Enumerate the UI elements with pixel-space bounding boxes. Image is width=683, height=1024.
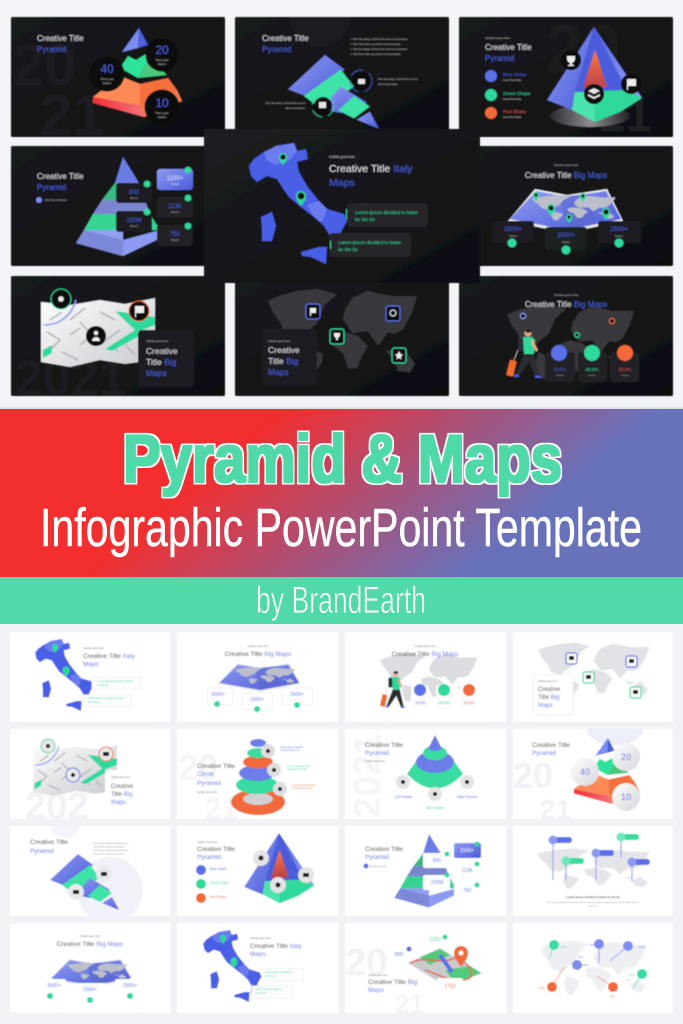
panel: light pyramid numbers slide: 21: [540, 794, 571, 825]
panel: dark slide traveller map: [459, 276, 673, 396]
panel: dark slide pyramid numbers: Pyramid: [37, 45, 66, 54]
panel: light stacked pyramid slide: 113K: [461, 868, 473, 874]
panel: dark slide traveller map: 70,5%: [553, 367, 567, 372]
panel: dark slide world map with pins: [235, 276, 449, 396]
panel: light route map slide: ITALY: [629, 974, 636, 977]
panel: light big maps slide: 3500+: [47, 983, 61, 989]
panel: light Italy slide lower: Maps: [250, 951, 267, 958]
panel: dark slide street map: Maps: [146, 368, 167, 378]
panel: featured Italy map slide: Creative Title Italy: [329, 163, 413, 175]
panel: featured Italy map slide: Subtitle goes here: [329, 155, 355, 159]
panel: light Italy slide lower: [177, 923, 338, 1013]
panel: light world map pins slide: Title Big: [538, 695, 559, 701]
panel: dark slide street map: [11, 276, 225, 406]
panel: dark slide stepped pyramid: and mountains: [378, 82, 398, 86]
panel: dark slide big folded map: Creative Title Big Maps: [525, 171, 607, 180]
panel: dark slide big folded map: [459, 146, 673, 266]
panel: light stacked pyramid slide: Pyramid: [365, 854, 389, 861]
panel: dark slide stepped pyramid: Pyramid: [262, 45, 291, 54]
panel: light stacked pyramid slide: Creative Title: [365, 846, 403, 853]
panel: light Italy slide lower: Creative Title Italy: [250, 943, 302, 950]
panel: light Italy slide lower: Lorem Ipsum decided to: [265, 971, 292, 974]
panel: dark slide street map: Creative: [146, 346, 178, 356]
panel: dark slide stepped pyramid: Far far away, behind the word: [266, 101, 305, 105]
panel: dark slide world map with pins: Title Big: [268, 356, 299, 366]
panel: dark slide pyramid numbers: This is your: [100, 77, 114, 81]
panel: light tall pyramid slide: Creative Title: [197, 846, 235, 853]
strip: by BrandEarth: by BrandEarth: [256, 580, 426, 622]
panel: light cone pyramid slide: Mid Pyramid: [426, 806, 444, 810]
panel: light tall pyramid slide: Pyramid: [197, 854, 221, 861]
panel: featured Italy map slide: Lorem Ipsum decided to leave: [355, 210, 418, 215]
panel: light folded map slide: Creative Title Big Maps: [225, 651, 292, 658]
panel: light circle pyramid slide: Pyramid: [197, 780, 221, 787]
panel: dark slide tall pyramid: 20: [545, 11, 621, 87]
panel: featured Italy map slide: for the far: [338, 247, 359, 252]
panel: light street map slide: 202: [25, 786, 88, 828]
panel: dark slide stepped pyramid: ✓ Far far away, behind the word mountains: [350, 47, 408, 51]
panel: light route map slide: EPL: [590, 944, 595, 947]
panel: light world map pins slide: Subtitle goes here: [538, 680, 558, 683]
panel: dark slide stacked pyramid: 113K: [168, 204, 182, 210]
panel: dark slide street map: 2021: [15, 350, 126, 406]
panel: light isometric map slide: 1750: [444, 984, 456, 990]
panel: light Italy slide lower: for the far: [265, 975, 276, 978]
panel: light pyramid numbers slide: Creative Title: [532, 742, 570, 749]
panel: dark slide stacked pyramid: 800: [129, 190, 140, 196]
heading: Pyramid & Maps: Pyramid & Maps: [123, 421, 562, 497]
panel: light circle pyramid slide: to leave for the far: [280, 749, 299, 752]
panel: light Italy slide: for the far: [88, 700, 100, 704]
panel: dark slide tall pyramid: Pyramid: [485, 54, 514, 63]
panel: light circle pyramid slide: to leave for the far: [292, 787, 311, 790]
panel: dark slide traveller map: Tourism: [556, 374, 564, 377]
panel: dark slide pyramid numbers: This is your: [155, 111, 169, 115]
panel: light stepped pyramid slide: Pyramid: [30, 848, 54, 855]
panel: light tall pyramid slide: [177, 826, 338, 916]
panel: light world map with flag pins slide: Far far away, behind the word mountains, far from the countries vokalia and Consonantia. Were they live: [547, 901, 640, 904]
panel: featured Italy map slide: Maps: [329, 177, 355, 189]
panel: light stacked pyramid slide: 800: [433, 858, 441, 864]
panel: light traveller slide: 80,5%: [439, 701, 450, 705]
panel: light Italy slide lower: Subtitle goes here: [250, 936, 271, 940]
panel: dark slide big folded map: Tourism: [615, 235, 623, 238]
panel: light tall pyramid slide: Blue Shape: [210, 867, 227, 871]
panel: light traveller slide: Creative Title Big Maps: [392, 651, 459, 658]
panel: light circle pyramid slide: to leave for the far: [287, 768, 306, 771]
panel: dark slide pyramid numbers: 10: [155, 96, 169, 110]
panel: light route map slide: TOKIO: [638, 946, 646, 949]
panel: light isometric map slide: Subtitle goes here: [368, 974, 388, 977]
panel: light circle pyramid slide: [177, 729, 338, 826]
panel: dark slide stepped pyramid: ✓ Far far away, behind the word mountains: [350, 37, 408, 41]
panel: light stepped pyramid slide: Creative Title: [30, 839, 68, 846]
panel: light cone pyramid slide: Creative Title: [365, 742, 403, 749]
panel: light tall pyramid slide: Red Shape: [210, 895, 226, 899]
panel: light cone pyramid slide: Right Pyramid: [457, 795, 477, 799]
panel: light traveller slide: [345, 632, 506, 722]
panel: dark slide world map with pins: Creative: [268, 345, 300, 355]
panel: dark slide pyramid numbers: 40: [100, 62, 114, 76]
panel: light route map slide: USA: [578, 956, 583, 959]
panel: dark slide pyramid numbers: This is your: [155, 58, 169, 62]
panel: dark slide big folded map: Tourism: [509, 235, 517, 238]
panel: dark slide pyramid numbers: feature: [158, 62, 167, 66]
panel: dark slide tall pyramid: Insert Text Here: [503, 78, 522, 82]
panel: dark slide stacked pyramid: Add Text Is Market: [45, 198, 67, 202]
panel: light circle pyramid slide: Circle: [197, 771, 214, 778]
panel: dark slide traveller map: 35,5%: [618, 367, 632, 372]
panel: featured Italy map slide: [204, 129, 480, 283]
panel: dark slide world map with pins: Maps: [268, 367, 289, 377]
panel: light stacked pyramid slide: [345, 826, 506, 916]
panel: light route map slide: MAX: [610, 995, 616, 998]
panel: light isometric map slide: 800: [395, 952, 403, 958]
panel: light big maps slide: Creative Title Big Maps: [57, 941, 124, 948]
panel: light Italy slide: Creative Title Italy: [83, 653, 135, 660]
panel: light folded map slide: 3500+: [211, 692, 225, 698]
panel: light Italy slide: for the far: [97, 683, 109, 687]
panel: light street map slide: Maps: [111, 800, 126, 806]
panel: light route map slide: LAND: [538, 987, 545, 990]
panel: light isometric map slide: 20: [345, 942, 387, 984]
panel: light tall pyramid slide: Subtitle Goes Here: [197, 841, 218, 844]
panel: light folded map slide: 2500+: [290, 692, 304, 698]
panel: dark slide tall pyramid: [459, 11, 673, 141]
panel: light big maps slide: Subtitle goes here: [80, 934, 101, 938]
panel: light isometric map slide: 21: [395, 989, 424, 1019]
panel: light pyramid numbers slide: Pyramid: [532, 750, 556, 757]
panel: dark slide tall pyramid: Blue Shape: [503, 72, 527, 77]
panel: light street map slide: Title Big: [111, 792, 132, 798]
panel: light route map slide: MAX: [561, 946, 567, 949]
panel: dark slide traveller map: Creative Title Big Maps: [525, 300, 607, 309]
panel: dark slide stepped pyramid: Far far away, behind the word: [378, 77, 418, 81]
panel: dark slide stacked pyramid: [11, 146, 225, 266]
panel: light stacked pyramid slide: 230M: [431, 880, 443, 886]
panel: dark slide pyramid numbers: feature: [158, 115, 167, 119]
panel: light folded map slide: [177, 632, 338, 722]
panel: dark slide stacked pyramid: Point E: [171, 239, 179, 242]
panel: light circle pyramid slide: Lorem Ipsum decided: [287, 765, 311, 768]
panel: dark slide big folded map: 1500+: [557, 232, 575, 239]
panel: light stepped pyramid slide: ✓ Far from the countries Consonantia: [92, 852, 125, 856]
panel: light Italy slide: Lorem Ipsum decided to leave: [88, 696, 125, 700]
panel: light world map pins slide: Creative: [538, 687, 561, 693]
panel: dark slide pyramid numbers: Creative Title: [37, 34, 84, 43]
panel: dark slide tall pyramid: Insert Text Here: [503, 115, 522, 119]
panel: dark slide stacked pyramid: 230M: [126, 218, 142, 224]
panel: dark slide pyramid numbers: 20: [155, 43, 169, 57]
panel: dark slide tall pyramid: Subtitle Goes Here: [485, 36, 511, 40]
panel: dark slide stacked pyramid: 1100+: [167, 176, 184, 182]
panel: dark slide traveller map: Subtitle goes here: [554, 293, 578, 297]
panel: light stacked pyramid slide: 750: [463, 888, 471, 894]
panel: light tall pyramid slide: Green Shape: [210, 881, 229, 885]
panel: dark slide traveller map: Tourism: [621, 374, 629, 377]
panel: dark slide street map: Subtitle goes here: [146, 339, 169, 343]
panel: light cone pyramid slide: 2021: [347, 733, 389, 818]
panel: dark slide stepped pyramid: [234, 16, 450, 130]
panel: light circle pyramid slide: Lorem Ipsum decided: [280, 746, 304, 749]
panel: light circle pyramid slide: Lorem Ipsum decided: [292, 784, 316, 787]
panel: light cone pyramid slide: [345, 729, 506, 819]
panel: light circle pyramid slide: 21: [205, 793, 238, 826]
panel: light street map slide: Subtitle goes here: [111, 776, 131, 779]
panel: dark slide pyramid numbers: 21: [40, 83, 105, 148]
panel: light cone pyramid slide: Pyramid: [365, 750, 389, 757]
panel: light Italy slide: [10, 632, 170, 722]
panel: light Italy slide lower: for the far: [255, 992, 266, 995]
panel: light folded map slide: Subtitle goes here: [248, 644, 269, 648]
panel: light cone pyramid slide: Left Pyramid: [394, 795, 412, 799]
panel: dark slide world map with pins: Subtitle goes here: [268, 339, 291, 343]
panel: light stacked pyramid slide: 1100+: [460, 848, 474, 854]
panel: dark slide traveller map: 80,5%: [585, 367, 599, 372]
panel: dark slide big folded map: Subtitle goes here: [554, 163, 578, 167]
panel: light stepped pyramid slide: ✓ Far far away, behind the word mountains: [92, 842, 128, 845]
panel: light world map pins slide: [513, 632, 673, 722]
panel: dark slide tall pyramid: Creative Title: [485, 43, 532, 52]
panel: dark slide stepped pyramid: and mountains: [285, 106, 305, 110]
panel: light isometric map slide: [345, 923, 506, 1019]
panel: dark slide big folded map: 2500+: [610, 226, 628, 233]
panel: light world map with flag pins slide: there live: [589, 904, 598, 908]
panel: light street map slide: [10, 729, 170, 828]
panel: dark slide stacked pyramid: Point D: [171, 211, 179, 214]
panel: light pyramid numbers slide: [513, 729, 673, 819]
banner: red to purple gradient: [0, 407, 683, 577]
panel: light traveller slide: 35,5%: [464, 701, 475, 705]
panel: dark slide big folded map: Tourism: [562, 241, 570, 244]
panel: light pyramid numbers slide: 20: [513, 755, 553, 796]
panel: light world map pins slide: Maps: [538, 703, 553, 709]
panel: light route map slide: [513, 923, 673, 1013]
panel: dark slide stepped pyramid: Creative Title: [262, 34, 309, 43]
panel: featured Italy map slide: for the far: [355, 217, 376, 222]
panel: light big maps slide: 1500+: [83, 987, 97, 993]
panel: dark slide big folded map: 3500+: [504, 226, 522, 233]
panel: light traveller slide: Subtitle goes here: [415, 644, 436, 648]
panel: dark slide tall pyramid: 21: [600, 89, 651, 141]
panel: dark slide pyramid numbers: 20: [12, 33, 77, 98]
panel: light world map with flag pins slide: [513, 826, 673, 916]
panel: dark slide tall pyramid: Insert Text Here: [503, 97, 522, 101]
panel: light pyramid numbers slide: 20: [621, 752, 631, 762]
panel: dark slide stacked pyramid: 750: [170, 232, 181, 238]
panel: dark slide tall pyramid: Green Shape: [503, 91, 531, 96]
panel: dark slide stacked pyramid: Point A: [130, 197, 138, 200]
panel: light world map with flag pins slide: Lorem Ipsum decided to leave for the far: [566, 895, 621, 899]
panel: dark slide street map: Title Big: [146, 357, 177, 367]
panel: light Italy slide lower: Lorem Ipsum decided to: [255, 988, 282, 991]
panel: featured Italy map slide: Lorem Ipsum decided to leave: [338, 240, 401, 245]
strip: by BrandEarth: [0, 577, 683, 624]
panel: dark slide tall pyramid: Red Shape: [503, 109, 526, 114]
panel: dark slide stepped pyramid: ✓ Far from the countries Consonantia: [350, 42, 401, 46]
panel: light street map slide: Creative: [111, 784, 134, 790]
panel: dark slide stacked pyramid: Creative Title: [37, 172, 84, 181]
panel: light cone pyramid slide: Subtitle Goes Here: [365, 760, 386, 763]
panel: dark slide stacked pyramid: Point B: [171, 183, 179, 186]
panel: light Italy slide: Maps: [83, 661, 100, 668]
panel: light circle pyramid slide: Creative Title: [197, 763, 235, 770]
panel: light big maps slide: [10, 923, 170, 1013]
panel: light traveller slide: 70,5%: [415, 701, 426, 705]
panel: light stepped pyramid slide: ✓ Far far away, behind the word mountains: [92, 849, 128, 852]
panel: light Italy slide: Subtitle goes here: [83, 646, 104, 650]
panel: dark slide pyramid numbers: [11, 17, 225, 148]
panel: light Italy slide: Lorem Ipsum decided to leave: [97, 679, 134, 683]
panel: light pyramid numbers slide: 10: [621, 792, 631, 802]
panel: dark slide traveller map: Tourism: [588, 374, 596, 377]
panel: dark slide stacked pyramid: Point C: [130, 225, 138, 228]
panel: light stepped pyramid slide: ✓ Far from the countries Consonantia: [92, 846, 125, 848]
panel: light isometric map slide: 1200: [429, 937, 441, 943]
panel: light pyramid numbers slide: 40: [580, 767, 590, 777]
panel: light folded map slide: 1500+: [250, 697, 264, 703]
panel: dark slide pyramid numbers: feature: [103, 81, 112, 85]
panel: light isometric map slide: Maps: [368, 987, 385, 994]
panel: dark slide stepped pyramid: ✓ Far from the countries Consonantia: [350, 52, 401, 56]
panel: light circle pyramid slide: Subtitle Goes Here: [197, 791, 218, 794]
panel: light stacked pyramid slide: Add Text Is Market: [370, 865, 387, 868]
panel: light big maps slide: 2500+: [123, 983, 137, 989]
panel: light stepped pyramid slide: [10, 826, 170, 916]
panel: light isometric map slide: Creative Title Big: [368, 979, 418, 986]
panel: dark slide stacked pyramid: Pyramid: [37, 183, 66, 192]
panel: light circle pyramid slide: 20: [178, 747, 218, 788]
lower gallery background: [0, 624, 683, 1024]
